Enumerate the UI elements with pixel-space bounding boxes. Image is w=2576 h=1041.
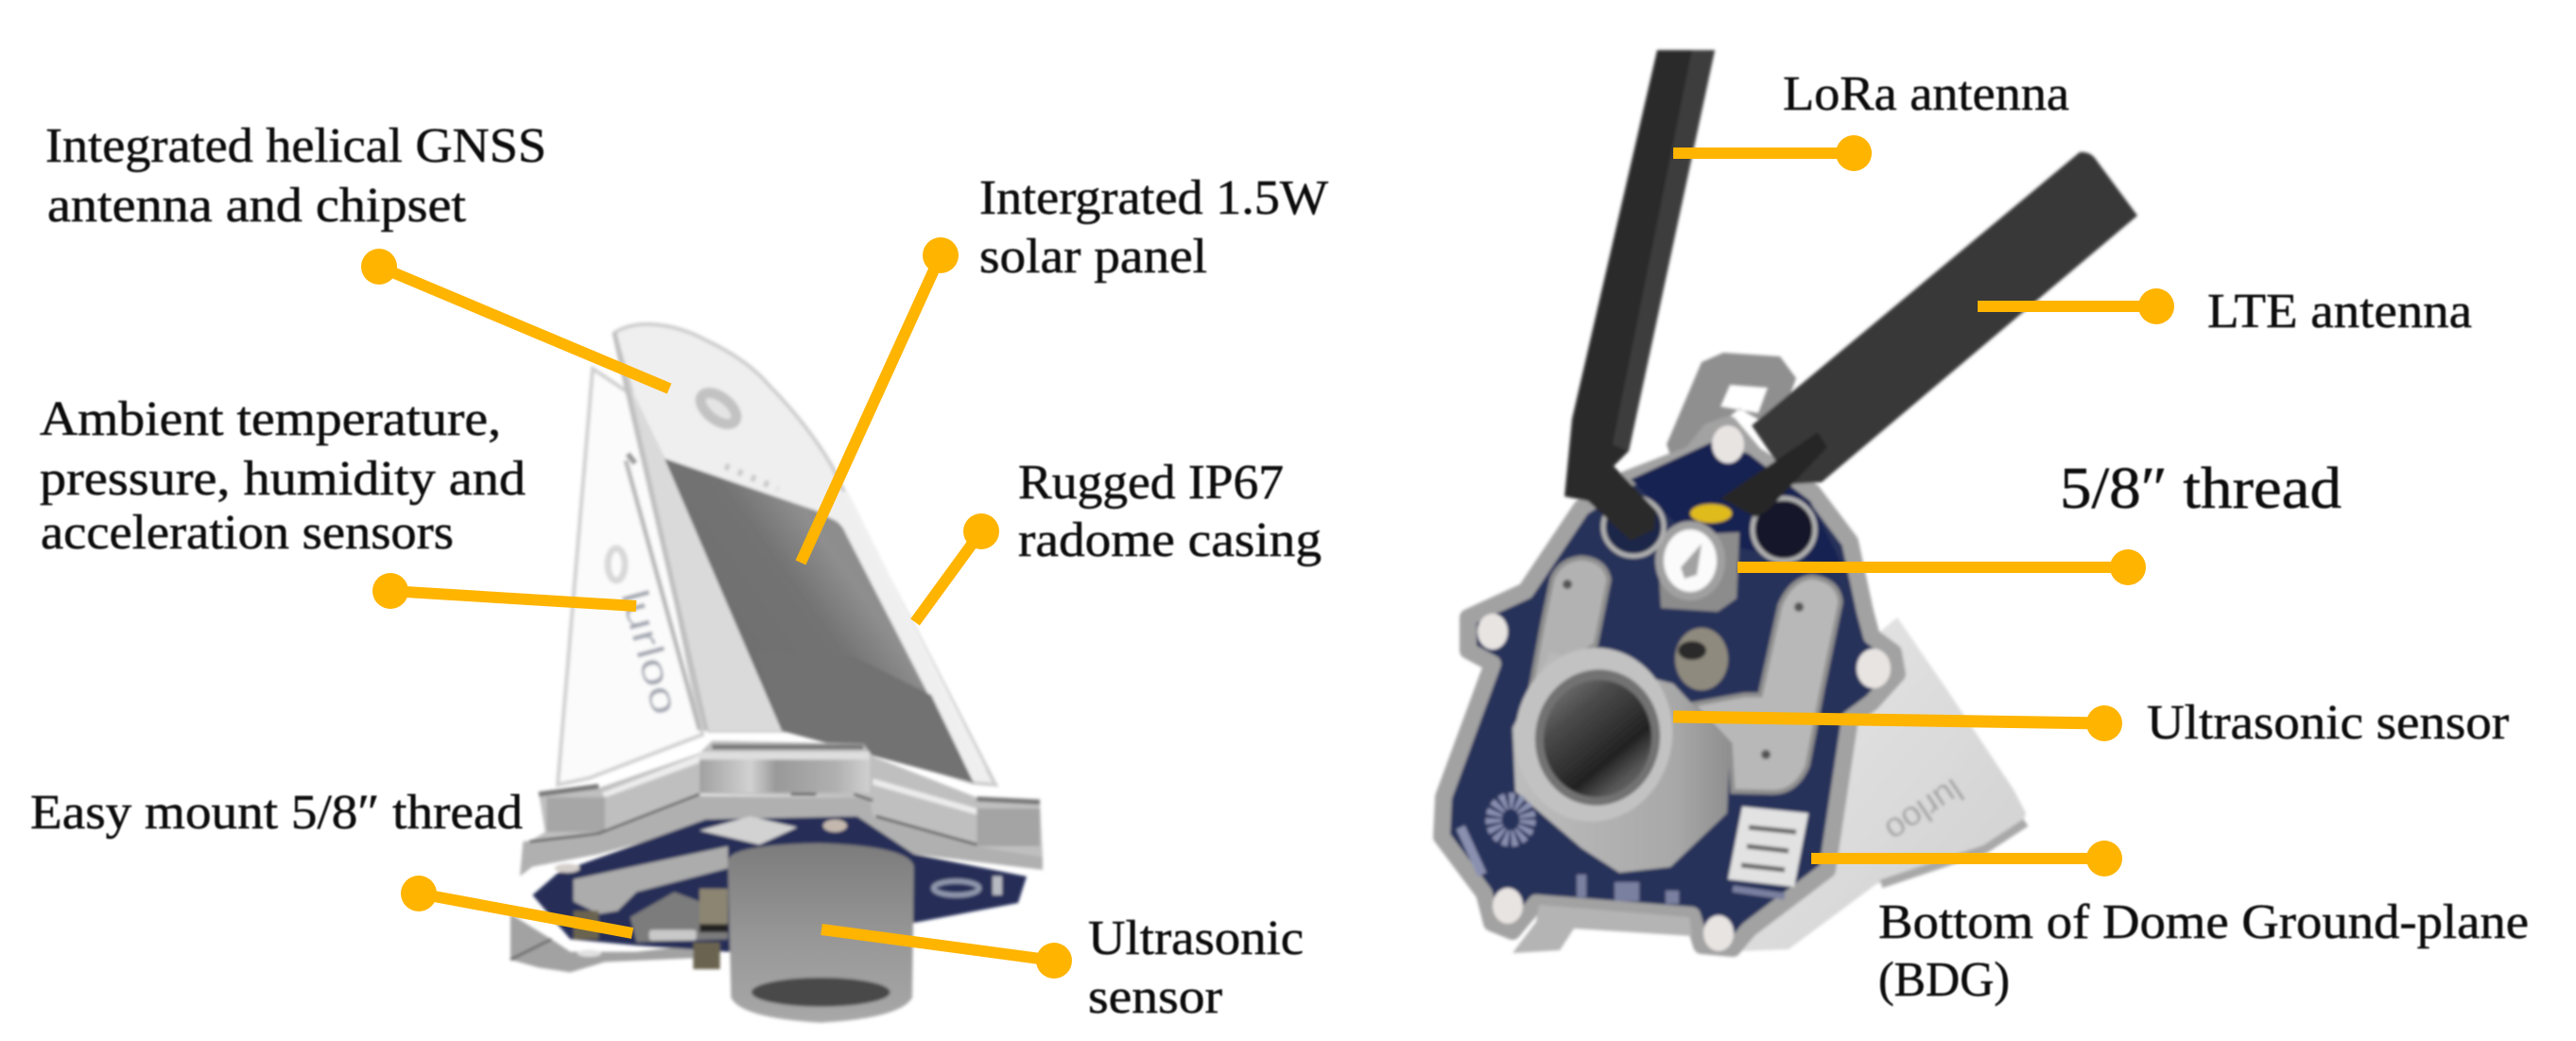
label: solar panel: Intergrated 1.5W — [979, 171, 1328, 225]
plate details: arms, sensor cup, thread, connector, screws — [1461, 425, 1891, 951]
label: ambient sensors: pressure, humidity and — [40, 452, 526, 506]
label: ambient sensors: Ambient temperature, — [40, 392, 501, 446]
LTE antenna joint — [1720, 432, 1827, 517]
callout: ultrasonic sensor left — [821, 929, 1072, 979]
LoRa antenna body — [1565, 50, 1715, 541]
label: solar panel: solar panel — [979, 230, 1207, 284]
right device: antennas and mounting plate — [1442, 50, 2137, 953]
callout: ambient sensors — [372, 573, 636, 609]
callout: 5/8 thread — [1738, 549, 2146, 585]
callout: solar panel — [801, 237, 959, 563]
label: GNSS antenna — [45, 119, 546, 233]
label: bottom of dome ground-plane — [1878, 895, 2529, 1007]
callout: LTE antenna — [1978, 288, 2174, 324]
label: bottom of dome ground-plane: Bottom of Dome Ground-plane — [1878, 895, 2529, 949]
label: easy mount thread: Easy mount 5/8″ thread — [30, 786, 523, 840]
callout: bottom of dome ground-plane — [1811, 841, 2122, 876]
label: radome casing — [1018, 456, 1322, 567]
LTE antenna body — [1752, 152, 2137, 484]
left device: radome sensor — [510, 324, 1043, 1023]
radome top and solar panel — [608, 324, 995, 785]
label: bottom of dome ground-plane: (BDG) — [1878, 953, 2010, 1007]
label: ultrasonic sensor left: sensor — [1088, 970, 1222, 1024]
label: ultrasonic sensor left — [1088, 911, 1304, 1024]
mounting loop — [1667, 353, 1796, 463]
radome fin behind plate: lurloo — [1878, 771, 1970, 851]
logo text on radome: lurloo — [613, 585, 686, 720]
darker navy upper area — [1631, 442, 1843, 567]
label: solar panel — [979, 171, 1328, 284]
callout: GNSS antenna — [361, 249, 669, 389]
plate outline and navy board — [1442, 425, 1897, 948]
label: ambient sensors: acceleration sensors — [41, 506, 454, 560]
callout: ultrasonic sensor right — [1673, 705, 2122, 741]
label: ultrasonic sensor left: Ultrasonic — [1088, 911, 1304, 965]
callout: easy mount thread — [401, 876, 632, 933]
label: GNSS antenna: Integrated helical GNSS — [45, 119, 546, 173]
label: radome casing: Rugged IP67 — [1018, 456, 1284, 510]
base housing, circuit board and ultrasonic cylinder — [510, 740, 1043, 1023]
label: GNSS antenna: antenna and chipset — [47, 179, 467, 233]
label: LTE antenna: LTE antenna — [2207, 285, 2472, 338]
label: LoRa antenna: LoRa antenna — [1783, 67, 2069, 121]
callout: LoRa antenna — [1673, 135, 1872, 171]
radome back fin — [558, 369, 702, 785]
bottom bar of plate — [1513, 905, 1692, 953]
radome fin behind plate — [1739, 617, 2026, 951]
callout: radome casing — [915, 513, 999, 622]
label: ambient sensors — [40, 392, 526, 560]
label: 5/8 thread: 5/8″ thread — [2060, 457, 2342, 521]
label: ultrasonic sensor right: Ultrasonic sensor — [2147, 696, 2509, 750]
label: radome casing: radome casing — [1018, 513, 1322, 567]
